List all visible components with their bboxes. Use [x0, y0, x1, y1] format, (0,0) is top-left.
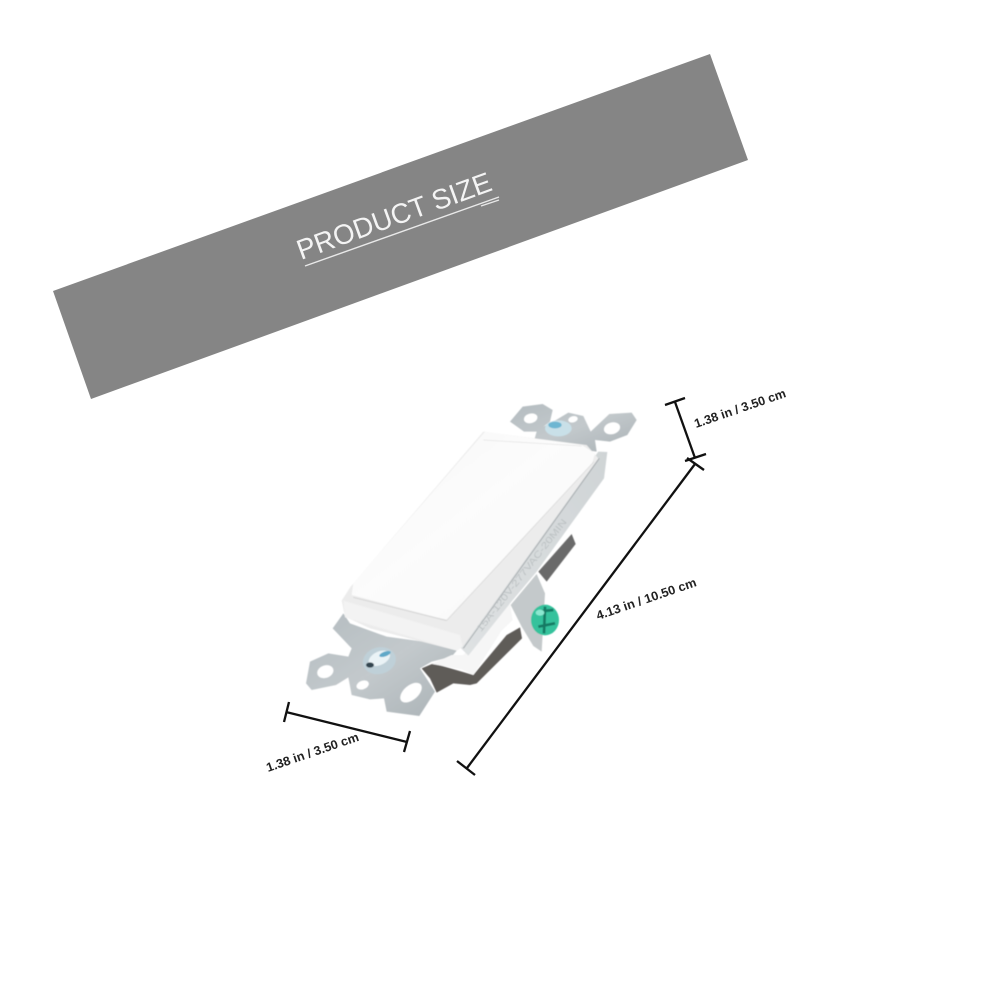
product photo: rocker switch: [306, 404, 637, 716]
bottom screw: [360, 643, 399, 678]
banner: product size: [53, 54, 748, 399]
label: height: 4.13 in / 10.50 cm: [594, 575, 698, 623]
bottom mounting plate: [306, 613, 460, 716]
top mounting plate: [510, 404, 637, 452]
dimension: top width: [665, 386, 788, 461]
label: bottom width: 1.38 in / 3.50 cm: [264, 730, 361, 775]
dimension: height: [457, 458, 704, 775]
rocker face: [352, 432, 595, 619]
banner heading: PRODUCT SIZE: [292, 166, 496, 266]
white housing lip: [432, 603, 513, 675]
top screw: [545, 420, 572, 436]
side strap edge highlight: [463, 458, 599, 648]
heading underline: [305, 197, 499, 266]
dimension: bottom width: [264, 702, 410, 775]
ground tab: [511, 574, 545, 652]
dark switch housing upper: [538, 534, 576, 582]
green ground screw: [531, 605, 559, 635]
switch white body: [342, 432, 598, 651]
label: top width: 1.38 in / 3.50 cm: [692, 386, 788, 431]
dark switch housing lower: [422, 627, 522, 693]
metal side strap: [459, 452, 607, 656]
side strap engraved rating: 15A-120V-277VAC-20MIN: [475, 517, 569, 634]
